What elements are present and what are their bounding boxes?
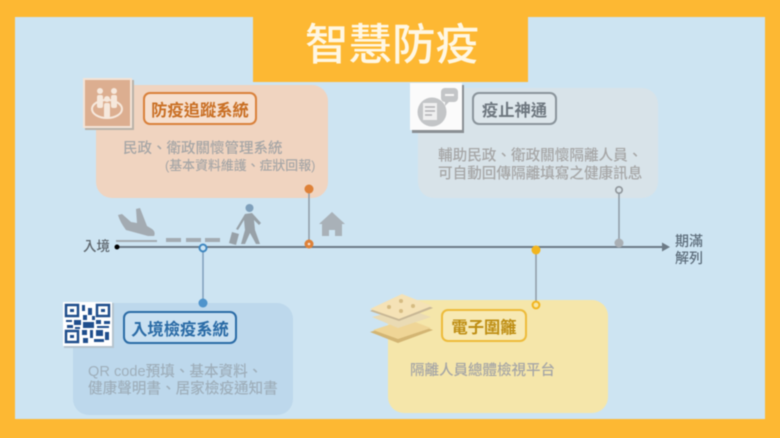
tag: 入境檢疫系統: 入境檢疫系統 <box>131 320 229 338</box>
tag: 電子圍籬: 電子圍籬 <box>451 318 517 336</box>
tag: 防疫追蹤系統: 防疫追蹤系統 <box>151 102 249 120</box>
node: orange <box>304 240 314 248</box>
start dot <box>114 244 120 250</box>
ground dashes <box>116 238 220 242</box>
node: yellow <box>532 246 540 254</box>
node: gray <box>614 238 624 248</box>
icon: stacked map layers <box>370 294 433 344</box>
label: 期滿解列: 期滿 解列 <box>675 233 703 266</box>
icon: house <box>319 212 345 236</box>
icon: people group <box>82 78 134 130</box>
tag: 疫止神通: 疫止神通 <box>482 102 547 120</box>
icon: app chat <box>410 82 464 134</box>
panel: 疫止神通 <box>418 88 658 198</box>
description: 電子圍籬: 隔離人員總體檢視平台 <box>410 363 555 379</box>
icon: QR code <box>62 302 114 348</box>
tag: 入境檢疫系統 <box>123 311 237 344</box>
tag: 電子圍籬 <box>441 309 527 342</box>
connector: 防疫追蹤系統 <box>304 184 314 244</box>
tag: 防疫追蹤系統 <box>143 92 257 125</box>
panel: 入境檢疫系統 <box>73 303 293 415</box>
label: 入境: 入境 <box>83 239 110 254</box>
timeline arrow <box>117 242 670 252</box>
title: 智慧防疫 <box>305 22 479 70</box>
connector: 疫止神通 <box>616 187 622 243</box>
title banner <box>253 0 528 82</box>
description: details: (基本資料維護、症狀回報) <box>165 158 315 173</box>
panel: 電子圍籬 <box>388 300 608 413</box>
connector: 電子圍籬 <box>533 250 539 308</box>
description: 疫止神通: 輔助民政、衛政關懷隔離人員、 可自動回傳隔離填寫之健康訊息 <box>438 148 642 182</box>
description: 入境檢疫系統: QR code預填、基本資料、 健康聲明書、居家檢疫通知書 <box>88 364 278 397</box>
connector: 入境檢疫系統 <box>198 248 208 308</box>
icon: plane <box>118 208 155 236</box>
panel: 防疫追蹤系統 <box>96 85 328 198</box>
node: blue <box>200 244 206 252</box>
tag: 疫止神通 <box>472 92 557 125</box>
icon: traveller with suitcase <box>229 204 261 245</box>
description: 民政: 民政、衛政關懷管理系統 <box>123 141 282 157</box>
